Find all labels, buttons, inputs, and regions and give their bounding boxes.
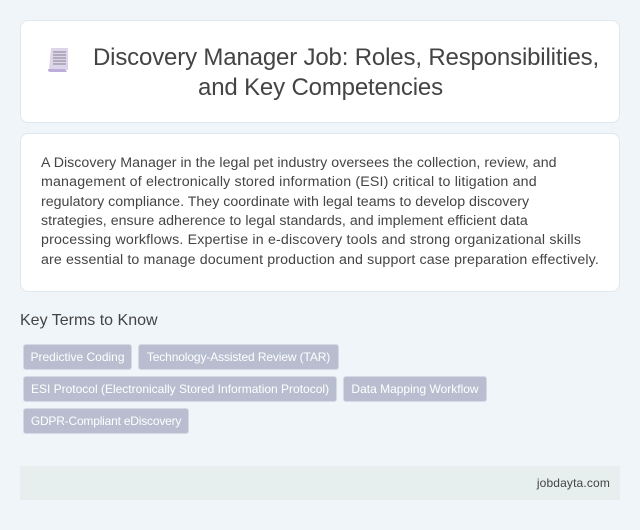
- icon: document scroll: [48, 48, 68, 72]
- tag: ESI Protocol (Electronically Stored Information Protocol): [31, 382, 329, 396]
- text block: description: A Discovery Manager in the legal pet industry oversees the collection, review, and: [41, 155, 557, 171]
- tag: [23, 376, 337, 402]
- tag: [23, 344, 132, 370]
- tag: Technology-Assisted Review (TAR): [147, 350, 330, 364]
- tag: Data Mapping Workflow: [351, 382, 479, 396]
- text block: description: [41, 155, 599, 268]
- text block: description: are essential to manage document production and support case preparation effectively.: [41, 252, 599, 268]
- title: [93, 44, 599, 101]
- title: Discovery Manager Job: Roles, Responsibilities,: [93, 44, 599, 71]
- tag: [343, 376, 487, 402]
- title: and Key Competencies: [198, 74, 443, 101]
- panel: description: [20, 133, 620, 292]
- footer bar: [20, 466, 620, 500]
- tag: [23, 408, 189, 434]
- tag: GDPR-Compliant eDiscovery: [31, 414, 181, 428]
- text block: description: strategies, ensure adherence to legal standards, and implement efficient data: [41, 213, 528, 229]
- footer source: jobdayta.com: [537, 476, 610, 490]
- heading: key terms: Key Terms to Know: [20, 312, 158, 329]
- text block: description: management of electronically stored information (ESI) critical to litigation and: [41, 174, 537, 190]
- panel: title card: [20, 20, 620, 123]
- tag: Predictive Coding: [30, 350, 125, 364]
- text block: description: processing workflows. Expertise in e-discovery tools and strong organizational skills: [41, 232, 581, 248]
- tag list: [23, 344, 487, 434]
- tag: [138, 344, 339, 370]
- text block: description: regulatory compliance. They coordinate with legal teams to develop discovery: [41, 194, 529, 210]
